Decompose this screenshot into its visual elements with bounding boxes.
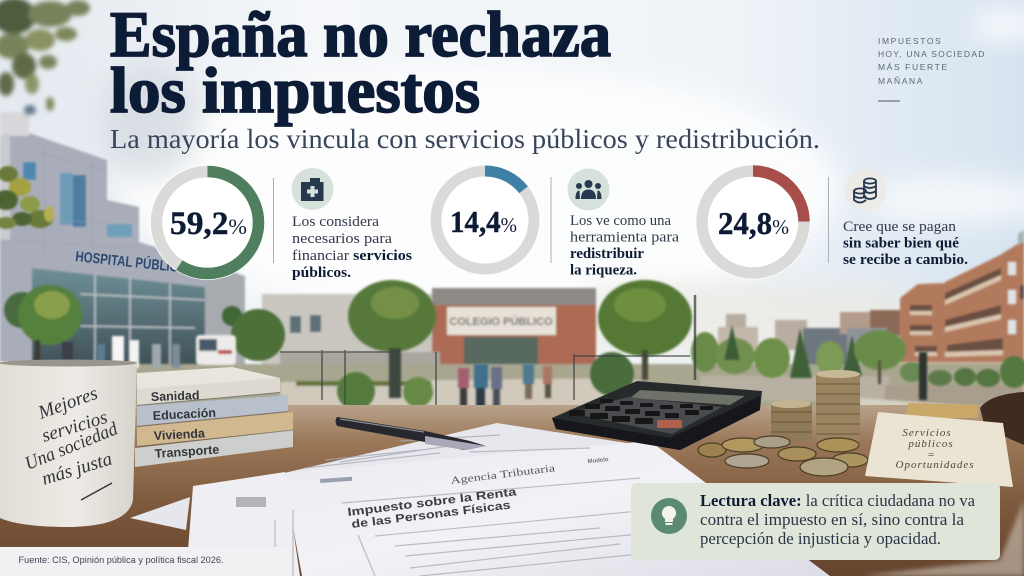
sticky note: = [927,449,935,461]
description: herramienta para [570,230,680,246]
book stack: Transporte [154,443,220,461]
wallet [905,392,1024,445]
icon: coins [844,169,886,211]
description: financiar servicios [292,248,412,264]
school building: COLEGIO PÚBLICO [449,315,553,328]
foliage left of hospital [0,166,54,229]
callout: lectura clave [631,483,1000,560]
tax papers: de las Personas Físicas [351,500,511,531]
apartments [900,230,1024,386]
description: se recibe a cambio. [843,252,968,268]
description: públicos. [292,265,351,281]
tax papers [130,423,1024,576]
calculator [552,381,762,450]
ambulance [196,335,236,365]
book stack: Educación [152,406,216,423]
sticky note: Servicios [902,427,952,439]
icon: hospital [292,168,334,210]
icon: people [568,168,610,210]
hospital building [0,112,245,368]
hospital sign: HOSPITAL PÚBLICO [75,247,188,277]
mug: Mejores [35,383,101,424]
stat: 24,8% [696,164,968,280]
description: Los considera [292,214,380,230]
tagline: HOY, UNA SOCIEDAD [878,49,986,59]
distant city [718,310,902,368]
tagline: MÁS FUERTE [878,62,949,72]
tax papers: Impuesto sobre la Renta [347,486,518,519]
donut chart: 24,8% [696,164,810,280]
book stack: Sanidad [151,388,200,404]
description: necesarios para [292,231,393,247]
icon: light bulb [651,498,687,534]
tagline: IMPUESTOS [878,36,942,46]
pavement and walls [0,364,1024,412]
tax papers: Modelo [587,457,609,465]
table [0,405,1024,576]
donut chart: 24,8%: 24,8% [718,205,789,241]
subtitle: La mayoría los vincula con servicios públicos y redistribución. [110,124,820,154]
school building [262,288,596,387]
trees [4,280,1024,410]
callout text: Lectura clave: la crítica ciudadana no va [700,491,975,510]
book stack [135,367,293,467]
description [570,213,680,278]
mug [0,360,137,527]
mug: más justa [39,449,115,490]
book stack: Vivienda [153,426,206,443]
sticky note [865,412,1013,487]
stat: 14,4% [430,165,680,278]
callout text [700,491,975,548]
tagline [878,36,986,102]
callout text: contra el impuesto en sí, sino contra la [700,510,964,529]
coins [698,370,868,476]
title: España no rechaza [110,0,611,71]
title [110,0,611,127]
stat: 59,2% [150,165,412,281]
fence [280,295,695,406]
foliage top left [0,0,90,115]
tax papers: Agencia Tributaria [450,463,556,487]
sticky note: públicos [907,438,954,450]
description: sin saber bien qué [843,236,960,252]
donut chart: 59,2%: 59,2% [170,206,247,242]
sky [0,0,1024,420]
tagline: MAÑANA [878,76,924,86]
description: la riqueza. [570,262,637,278]
callout text: percepción de injusticia y opacidad. [700,529,941,548]
school sign [447,307,556,335]
title: los impuestos [110,54,480,127]
donut chart: 59,2% [150,165,265,280]
description: Los ve como una [570,213,672,229]
footer band [0,547,290,576]
people [62,335,927,408]
mug: Una sociedad [22,418,121,475]
mug: servicios [39,407,110,447]
sticky note: Oportunidades [896,459,974,471]
donut chart: 14,4% [430,165,540,275]
donut chart: 14,4%: 14,4% [450,204,517,239]
description: redistribuir [570,246,645,262]
description [843,219,968,268]
pen [336,417,486,450]
description: Cree que se pagan [843,219,957,235]
description [292,214,412,281]
source note: Fuente: CIS, Opinión pública y política fiscal 2026. [18,555,224,566]
